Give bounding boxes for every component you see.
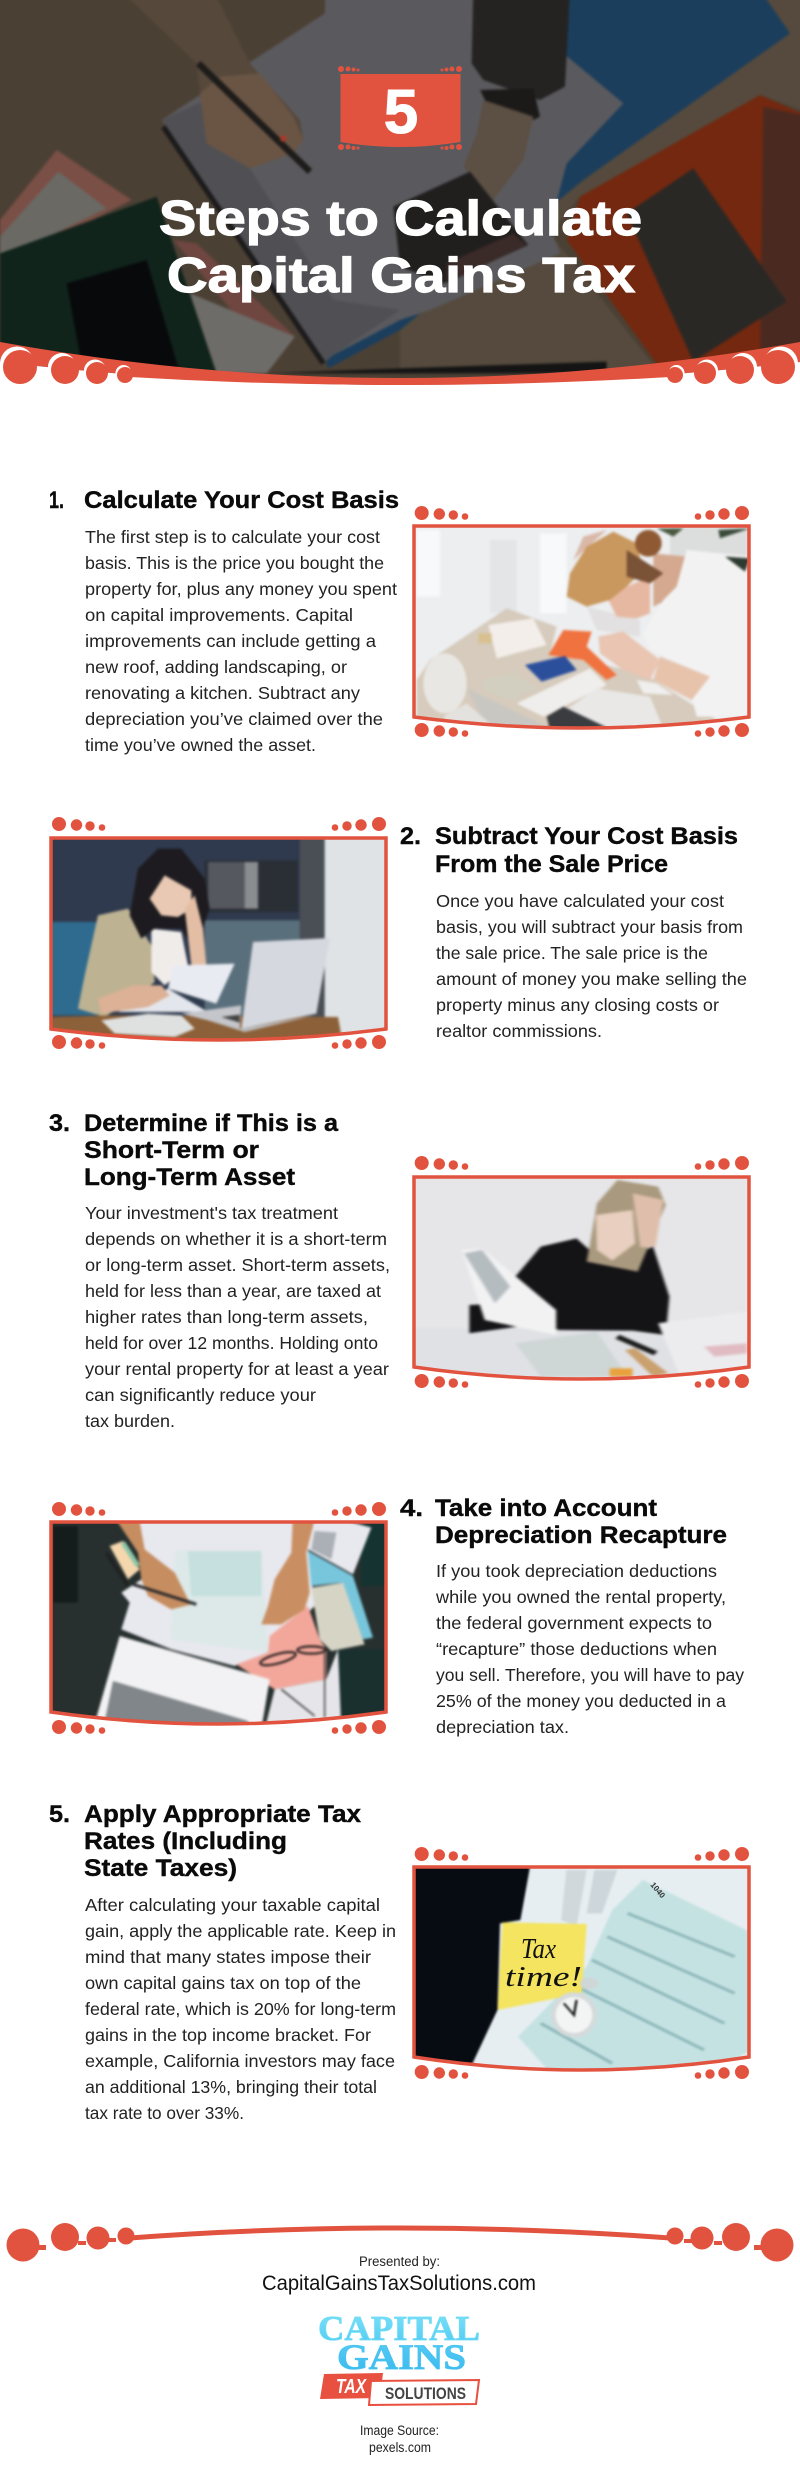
step 5 heading: Apply Appropriate Tax: [84, 1801, 362, 1828]
step 4 body text: the federal government expects to: [436, 1613, 712, 1633]
logo: GAINS: [337, 2337, 466, 2377]
step 2 heading: From the Sale Price: [435, 851, 668, 878]
logo: TAX: [336, 2376, 367, 2398]
step 5 body text: gains in the top income bracket. For: [85, 2025, 371, 2045]
title: [159, 192, 642, 303]
step 4 body text: [435, 1561, 744, 1737]
step 4 body text: If you took depreciation deductions: [436, 1561, 717, 1581]
step 5 body text: own capital gains tax on top of the: [85, 1973, 361, 1993]
step 5 body text: an additional 13%, bringing their total: [85, 2077, 377, 2097]
step 3 decorative dots: [415, 1156, 749, 1388]
step 2 heading: Subtract Your Cost Basis: [435, 823, 738, 850]
step 3 body text: Your investment's tax treatment: [85, 1203, 338, 1223]
step 4 heading: 4.: [400, 1495, 423, 1522]
step 5: [49, 1801, 760, 2123]
step 3 body text: held for less than a year, are taxed at: [85, 1281, 381, 1301]
image source: Image Source:: [360, 2423, 439, 2438]
step 3 body text: can significantly reduce your: [85, 1385, 316, 1405]
step 2 body text: property minus any closing costs or: [436, 995, 719, 1015]
step 1 body text: [85, 527, 397, 755]
step 5 photo: tax form with sticky note and clock: 1040: [648, 1881, 667, 1900]
step 4: [45, 1495, 744, 1737]
step 1 photo frame: [414, 526, 749, 728]
step 1 body text: The first step is to calculate your cost: [85, 527, 380, 547]
sticky note handwriting: Tax: [521, 1934, 557, 1965]
step 5 body text: [85, 1895, 396, 2123]
step 1 body text: new roof, adding landscaping, or: [85, 657, 347, 677]
step 2 decorative dots: [52, 817, 386, 1049]
image source: [360, 2423, 439, 2455]
step 2: [45, 817, 747, 1049]
step 5 body text: example, California investors may face: [85, 2051, 395, 2071]
sticky note handwriting: time!: [505, 1962, 582, 1993]
step 2 photo: woman reading papers at laptop: [52, 840, 384, 1038]
step 1 body text: time you’ve owned the asset.: [85, 735, 316, 755]
sticky note handwriting: [505, 1934, 582, 1993]
scallop circles right: [667, 346, 798, 384]
website: CapitalGainsTaxSolutions.com: [262, 2272, 536, 2295]
red band centre: [130, 364, 670, 385]
step 3 heading: [49, 1110, 339, 1191]
step 3 body text: higher rates than long-term assets,: [85, 1307, 368, 1327]
step 2 body text: Once you have calculated your cost: [436, 891, 724, 911]
step 4 body text: you sell. Therefore, you will have to pay: [436, 1665, 744, 1685]
image source: pexels.com: [369, 2440, 431, 2455]
header background photo: desk with calculator and paperwork: [0, 0, 800, 400]
step 5 body text: gain, apply the applicable rate. Keep in: [85, 1921, 396, 1941]
step 5 body text: tax rate to over 33%.: [85, 2103, 244, 2123]
footer curved divider with circles: [6, 2223, 794, 2262]
step 5 decorative dots: [415, 1847, 749, 2079]
step 5 heading: State Taxes): [84, 1855, 237, 1882]
step 5 heading: 5.: [49, 1801, 70, 1828]
step 5 heading: Rates (Including: [84, 1828, 287, 1855]
step 1: [49, 487, 760, 755]
logo: SOLUTIONS: [385, 2384, 466, 2403]
step 2 photo frame: [51, 838, 386, 1040]
step 1 photo: stressed woman resting on desk: [416, 528, 748, 726]
step 3 body text: held for over 12 months. Holding onto: [85, 1333, 378, 1353]
step 4 heading: [400, 1495, 727, 1549]
number badge: [338, 66, 462, 150]
step 1 body text: renovating a kitchen. Subtract any: [85, 683, 360, 703]
step 2 heading: [400, 823, 738, 878]
step 3 heading: Determine if This is a: [84, 1110, 339, 1137]
step 3 heading: Short-Term or: [84, 1137, 259, 1164]
step 4 body text: 25% of the money you deducted in a: [436, 1691, 726, 1711]
step 1 heading: Calculate Your Cost Basis: [84, 487, 399, 514]
step 4 decorative dots: [52, 1502, 386, 1734]
step 3: [49, 1110, 760, 1431]
step 3 photo: worried woman holding her head over papers: [416, 1178, 748, 1378]
footer: [6, 2223, 794, 2455]
step 3 body text: tax burden.: [85, 1411, 175, 1431]
step 3 heading: 3.: [49, 1110, 70, 1137]
step 1 heading: 1.: [49, 487, 64, 514]
step 5 body text: mind that many states impose their: [85, 1947, 371, 1967]
step 2 body text: realtor commissions.: [436, 1021, 602, 1041]
header banner: [0, 0, 800, 400]
title: Capital Gains Tax: [167, 249, 635, 303]
step 4 photo: hands filling in a tax form beside a laptop: [52, 1524, 384, 1722]
step 2 body text: [436, 891, 747, 1041]
step 1 body text: improvements can include getting a: [85, 631, 376, 651]
step 1 body text: basis. This is the price you bought the: [85, 553, 384, 573]
step 2 body text: the sale price. The sale price is the: [436, 943, 708, 963]
step 3 body text: [85, 1203, 390, 1431]
logo: [318, 2309, 480, 2405]
number badge: 5: [384, 78, 418, 147]
step 4 body text: depreciation tax.: [436, 1717, 569, 1737]
step 4 body text: “recapture” those deductions when: [436, 1639, 717, 1659]
title: Steps to Calculate: [159, 192, 642, 246]
step 1 body text: property for, plus any money you spent: [85, 579, 397, 599]
step 3 body text: or long-term asset. Short-term assets,: [85, 1255, 390, 1275]
step 3 body text: your rental property for at least a year: [85, 1359, 389, 1379]
step 5 heading: [49, 1801, 362, 1882]
step 4 photo frame: [51, 1522, 386, 1724]
step 1 body text: depreciation you’ve claimed over the: [85, 709, 383, 729]
step 2 heading: 2.: [400, 823, 421, 850]
logo: CAPITAL: [318, 2309, 480, 2348]
step 5 photo: tax form with sticky note and clock: [416, 1868, 748, 2068]
white area below header: [0, 362, 800, 400]
step 5 body text: federal rate, which is 20% for long-term: [85, 1999, 396, 2019]
presented by: Presented by:: [359, 2254, 440, 2269]
step 3 photo frame: [414, 1177, 749, 1379]
scallop circles left: [0, 346, 133, 384]
step 2 body text: amount of money you make selling the: [436, 969, 747, 989]
step 3 heading: Long-Term Asset: [84, 1164, 295, 1191]
step 5 body text: After calculating your taxable capital: [85, 1895, 380, 1915]
step 1 decorative dots: [415, 506, 749, 737]
curved red ribbon: [0, 342, 800, 385]
step 2 body text: basis, you will subtract your basis from: [436, 917, 743, 937]
step 3 body text: depends on whether it is a short-term: [85, 1229, 387, 1249]
step 4 body text: while you owned the rental property,: [435, 1587, 726, 1607]
step 4 heading: Depreciation Recapture: [435, 1522, 727, 1549]
step 4 heading: Take into Account: [435, 1495, 657, 1522]
step 5 photo frame: [414, 1867, 749, 2070]
step 1 body text: on capital improvements. Capital: [85, 605, 353, 625]
